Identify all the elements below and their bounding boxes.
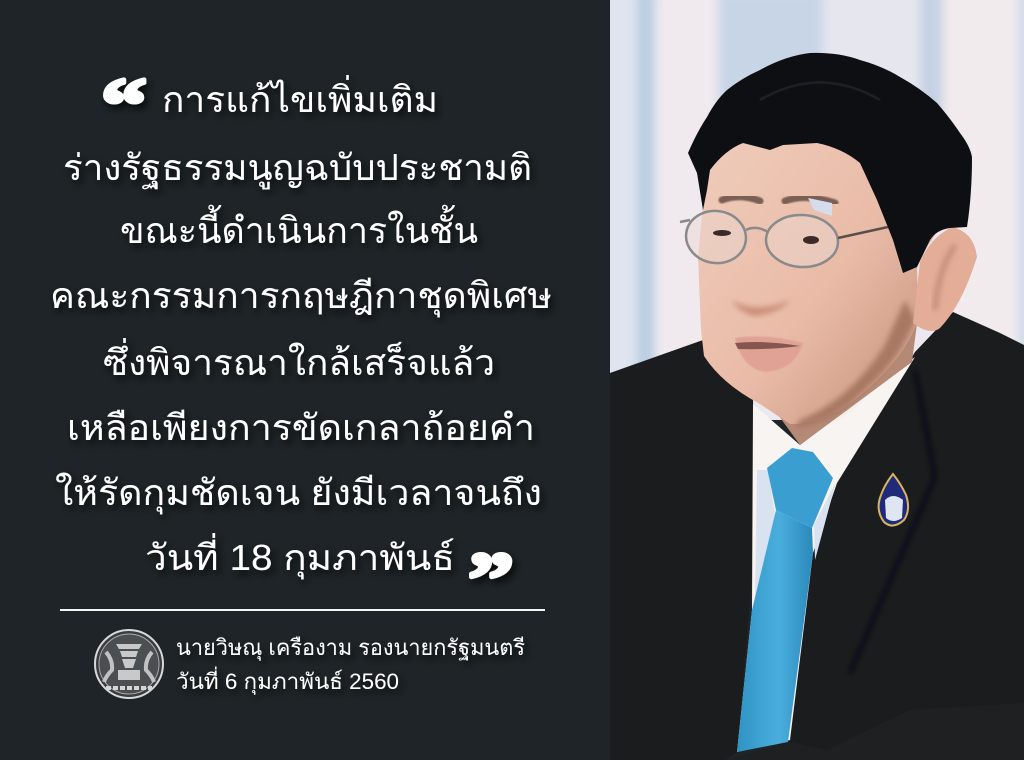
quote line 7: ให้รัดกุมชัดเจน ยังมีเวลาจนถึง bbox=[55, 472, 542, 515]
panel: dark quote background bbox=[0, 0, 610, 760]
date: วันที่ 6 กุมภาพันธ์ 2560 bbox=[176, 666, 399, 695]
quote text block bbox=[50, 63, 552, 622]
icon: lapel pin bbox=[879, 474, 908, 526]
speaker name and title: นายวิษณุ เครืองาม รองนายกรัฐมนตรี bbox=[176, 635, 525, 661]
quote line 2: ร่างรัฐธรรมนูญฉบับประชามติ bbox=[63, 147, 532, 190]
photo: ear bbox=[913, 227, 977, 331]
icon: government seal bbox=[95, 630, 163, 698]
divider line bbox=[60, 609, 545, 611]
quote line 5: ซึ่งพิจารณาใกล้เสร็จแล้ว bbox=[103, 338, 495, 383]
photo: curtain background bbox=[600, 0, 1024, 420]
photo: shirt collar bbox=[737, 357, 915, 752]
closing quote mark: ” bbox=[468, 538, 514, 622]
photo: glasses bbox=[680, 207, 888, 269]
attribution text bbox=[176, 635, 525, 695]
photo: hair bbox=[688, 53, 972, 273]
quote line 6: เหลือเพียงการขัดเกลาถ้อยคำ bbox=[67, 407, 535, 448]
photo: ear shading bbox=[935, 245, 955, 310]
panel: portrait photo bbox=[600, 0, 1024, 760]
photo: eyes bbox=[713, 230, 819, 244]
photo: shirt shadow bbox=[755, 470, 836, 600]
quote line 8: วันที่ 18 กุมภาพันธ์ bbox=[145, 533, 455, 580]
quote line 4: คณะกรรมการกฤษฎีกาชุดพิเศษ bbox=[50, 275, 552, 318]
opening quote mark: “ bbox=[101, 63, 147, 147]
photo: blue tie bbox=[737, 448, 833, 752]
photo: neck and face bbox=[698, 120, 935, 445]
photo: suit jacket bbox=[610, 312, 1024, 760]
quote line 1: การแก้ไขเพิ่มเติม bbox=[162, 75, 438, 120]
quote line 3: ขณะนี้ดำเนินการในชั้น bbox=[120, 204, 478, 251]
photo: sleeve lower right bbox=[725, 703, 1024, 760]
